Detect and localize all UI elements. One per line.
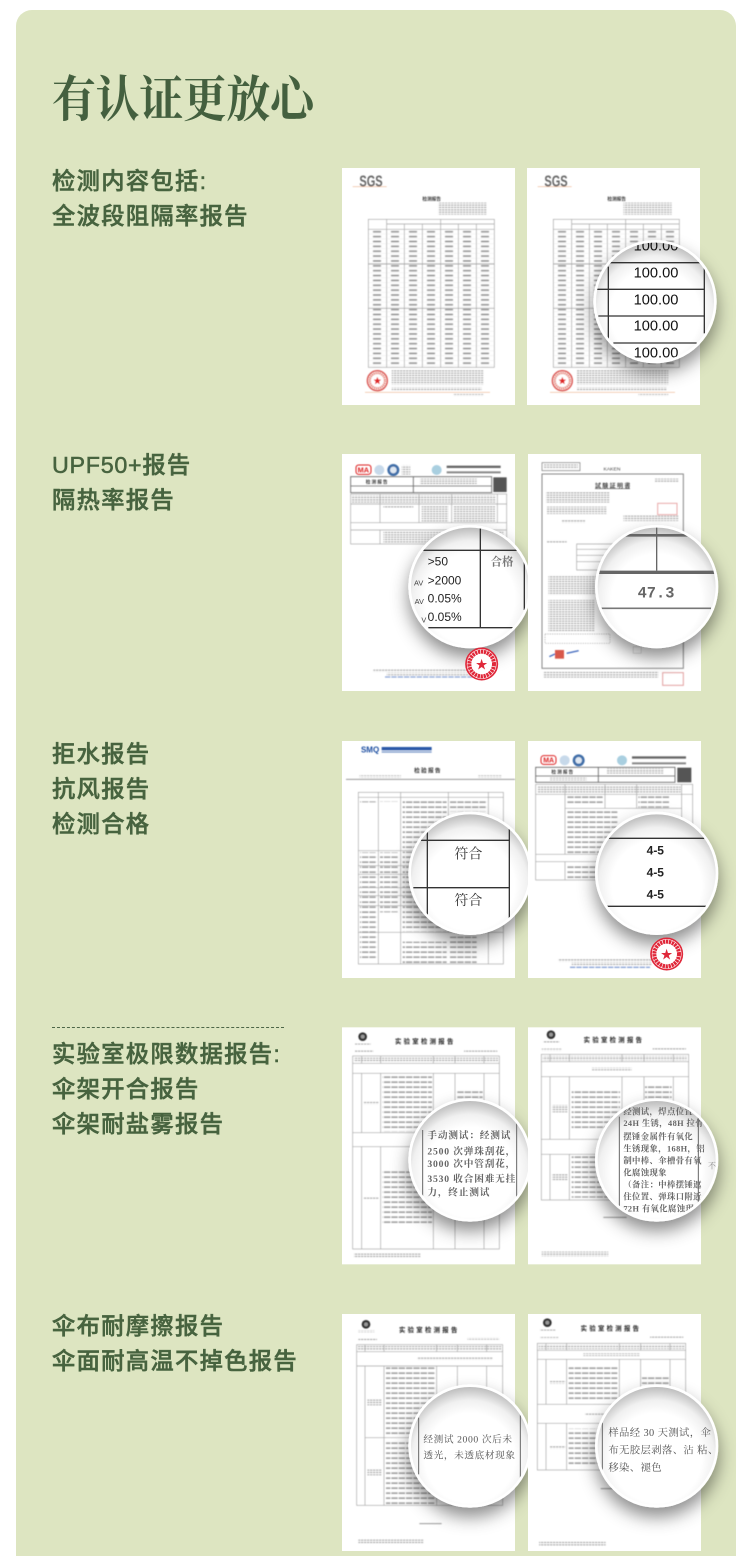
heading: full band report: 全波段阻隔率报告 [52,203,249,229]
magnifier: UPF values: AV [414,578,423,587]
magnifier: salt spray text: （备注：中棒摆锤遮 [623,1180,702,1190]
heading: UPF and heat reports: 隔热率报告 [52,487,175,513]
magnifier: 100.00: 100.00 [634,319,678,335]
heading: UPF and heat reports: UPF50+报告 [52,452,192,478]
report: UPF50+: MA [358,465,370,474]
magnifier: UPF values: >50 [428,555,448,569]
magnifier: salt spray text: 摆锤金属件有氧化 [623,1131,693,1141]
heading: full band report: 检测内容包括: [52,168,207,194]
magnifier: frame test text: 手动测试：经测试 [427,1129,511,1141]
report: heat insulation: 試 験 証 明 書 [595,481,630,490]
row 2: UPF and heat reports [342,454,717,691]
report: SGS with magnifier: ★ [558,376,566,385]
seal: ★ [476,657,488,671]
report: salt spray: 实验室检测报告 [584,1035,644,1044]
magnifier: UPF values: 合格 [491,555,514,569]
magnifier: colour fastness text: 移染、褪色 [608,1461,662,1474]
magnifier: colour fastness text: 样品经 30 天测试，伞 [608,1426,712,1439]
heading: full band report [52,168,249,229]
magnifier: frame test text [410,1100,530,1220]
report: SGS plain [342,168,515,405]
heading: abrasion and colour reports: 伞布耐摩擦报告 [52,1313,224,1339]
heading: lab limit reports [52,1041,281,1137]
heading: water and wind reports: 抗风报告 [52,776,150,802]
seal [651,938,682,970]
heading: water and wind reports: 拒水报告 [52,741,150,767]
report: SGS plain: SGS [359,174,383,191]
report: SGS plain: 检测报告 [422,196,441,203]
magnifier: 4-5: 4-5 [647,865,664,879]
side character: 不 [708,1162,716,1171]
report documents [342,168,730,1551]
magnifier: 符合: 符合 [454,846,482,862]
magnifier: frame test text: 3000 次中管刮花， [427,1158,516,1170]
magnifier: salt spray text: 生锈现象，168H，铝 [623,1143,705,1154]
magnifier: frame test text: 力，终止测试 [427,1187,490,1199]
magnifier: frame test text: 2500 次弹珠刮花， [427,1146,516,1158]
magnifier: 100.00: 100.00 [634,239,678,255]
seal [466,648,497,680]
report: wind resistance: 检 测 报 告 [551,769,574,776]
magnifier: 4-5: 4-5 [647,843,664,857]
magnifier: salt spray text: 住位置、弹珠口附近 [623,1191,702,1201]
report: wind resistance [528,741,717,978]
magnifier: 47.3: 47.3 [638,584,674,602]
heading: abrasion and colour reports [52,1313,298,1374]
row 4: lab limit reports [342,1027,717,1264]
magnifier: UPF values: 0.05% [428,591,462,605]
magnifier: salt spray text: 制中棒、伞槽骨有氧 [623,1156,702,1166]
report: colour fastness [528,1314,719,1551]
magnifier: salt spray text [596,1100,717,1220]
magnifier: abrasion text: 经测试 2000 次后未 [423,1434,513,1446]
magnifier: salt spray text: 72H 有氧化腐蚀现 [623,1203,694,1213]
magnifier: UPF values: 0.05% [428,610,462,624]
magnifier: 符合 [410,813,530,934]
report: water repellency: 检 验 报 告 [414,766,441,775]
magnifier: 100.00 [595,239,715,362]
heading: water and wind reports [52,741,150,837]
report: SGS with magnifier [527,168,715,405]
magnifier: UPF values [410,526,530,647]
magnifier: abrasion text: 透光，未透底材现象 [423,1450,516,1462]
magnifier: 4-5 [596,813,717,934]
magnifier: colour fastness text [596,1386,719,1506]
magnifier: 100.00: 100.00 [634,345,678,361]
row 5: abrasion and colour reports [342,1314,719,1551]
report: SGS with magnifier: 检测报告 [607,196,626,203]
magnifier: salt spray text: 化腐蚀现象 [623,1168,667,1178]
magnifier: 100.00: 100.00 [634,265,678,281]
magnifier: colour fastness text: 布无胶层剥落、沾 粘、 [608,1443,719,1456]
report: frame open close: 实验室检测报告 [395,1036,456,1045]
row 1: SGS reports [342,168,715,405]
magnifier: 47.3 [596,526,717,647]
heading: lab limit reports: 伞架耐盐雾报告 [52,1111,224,1137]
report: SGS plain: ★ [373,376,381,385]
report: wind resistance: MA [543,758,554,765]
report: heat insulation: KAKEN [604,466,621,472]
seal: ★ [661,947,673,961]
report: frame open close [342,1027,530,1264]
title: 有认证更放心 [52,73,314,128]
report: SGS with magnifier: SGS [544,174,568,191]
heading: lab limit reports: 伞架开合报告 [52,1076,200,1102]
magnifier: 4-5: 4-5 [647,887,664,901]
report: colour fastness: 实验室检测报告 [581,1323,641,1332]
heading: abrasion and colour reports: 伞面耐高温不掉色报告 [52,1348,298,1374]
magnifier: frame test text: 3530 收合困难无挂 [427,1173,516,1185]
row 3: water and wind reports [342,741,717,978]
report: abrasion [342,1314,530,1551]
report: UPF50+ [342,454,530,691]
magnifier: salt spray text: 经测试，焊点位置 [623,1106,693,1117]
report: salt spray [528,1027,717,1264]
dashed divider [52,1027,284,1028]
report: water repellency: SMQ [361,746,379,755]
magnifier: 100.00: 100.00 [634,292,678,308]
magnifier: 符合: 符合 [454,893,482,909]
heading: UPF and heat reports [52,452,192,513]
report: heat insulation [528,454,717,691]
magnifier: UPF values: >2000 [428,573,462,587]
heading: lab limit reports: 实验室极限数据报告: [52,1041,281,1067]
magnifier: UPF values: AV [415,597,424,606]
heading: water and wind reports: 检测合格 [52,811,150,837]
magnifier: abrasion text [410,1386,530,1506]
report: abrasion: 实验室检测报告 [399,1325,460,1334]
magnifier: salt spray text: 24H 生锈，48H 拉骨、 [623,1118,713,1129]
magnifier: UPF values: V [421,616,426,625]
report: UPF50+: 检 测 报 告 [366,478,388,485]
report: water repellency [342,741,530,978]
